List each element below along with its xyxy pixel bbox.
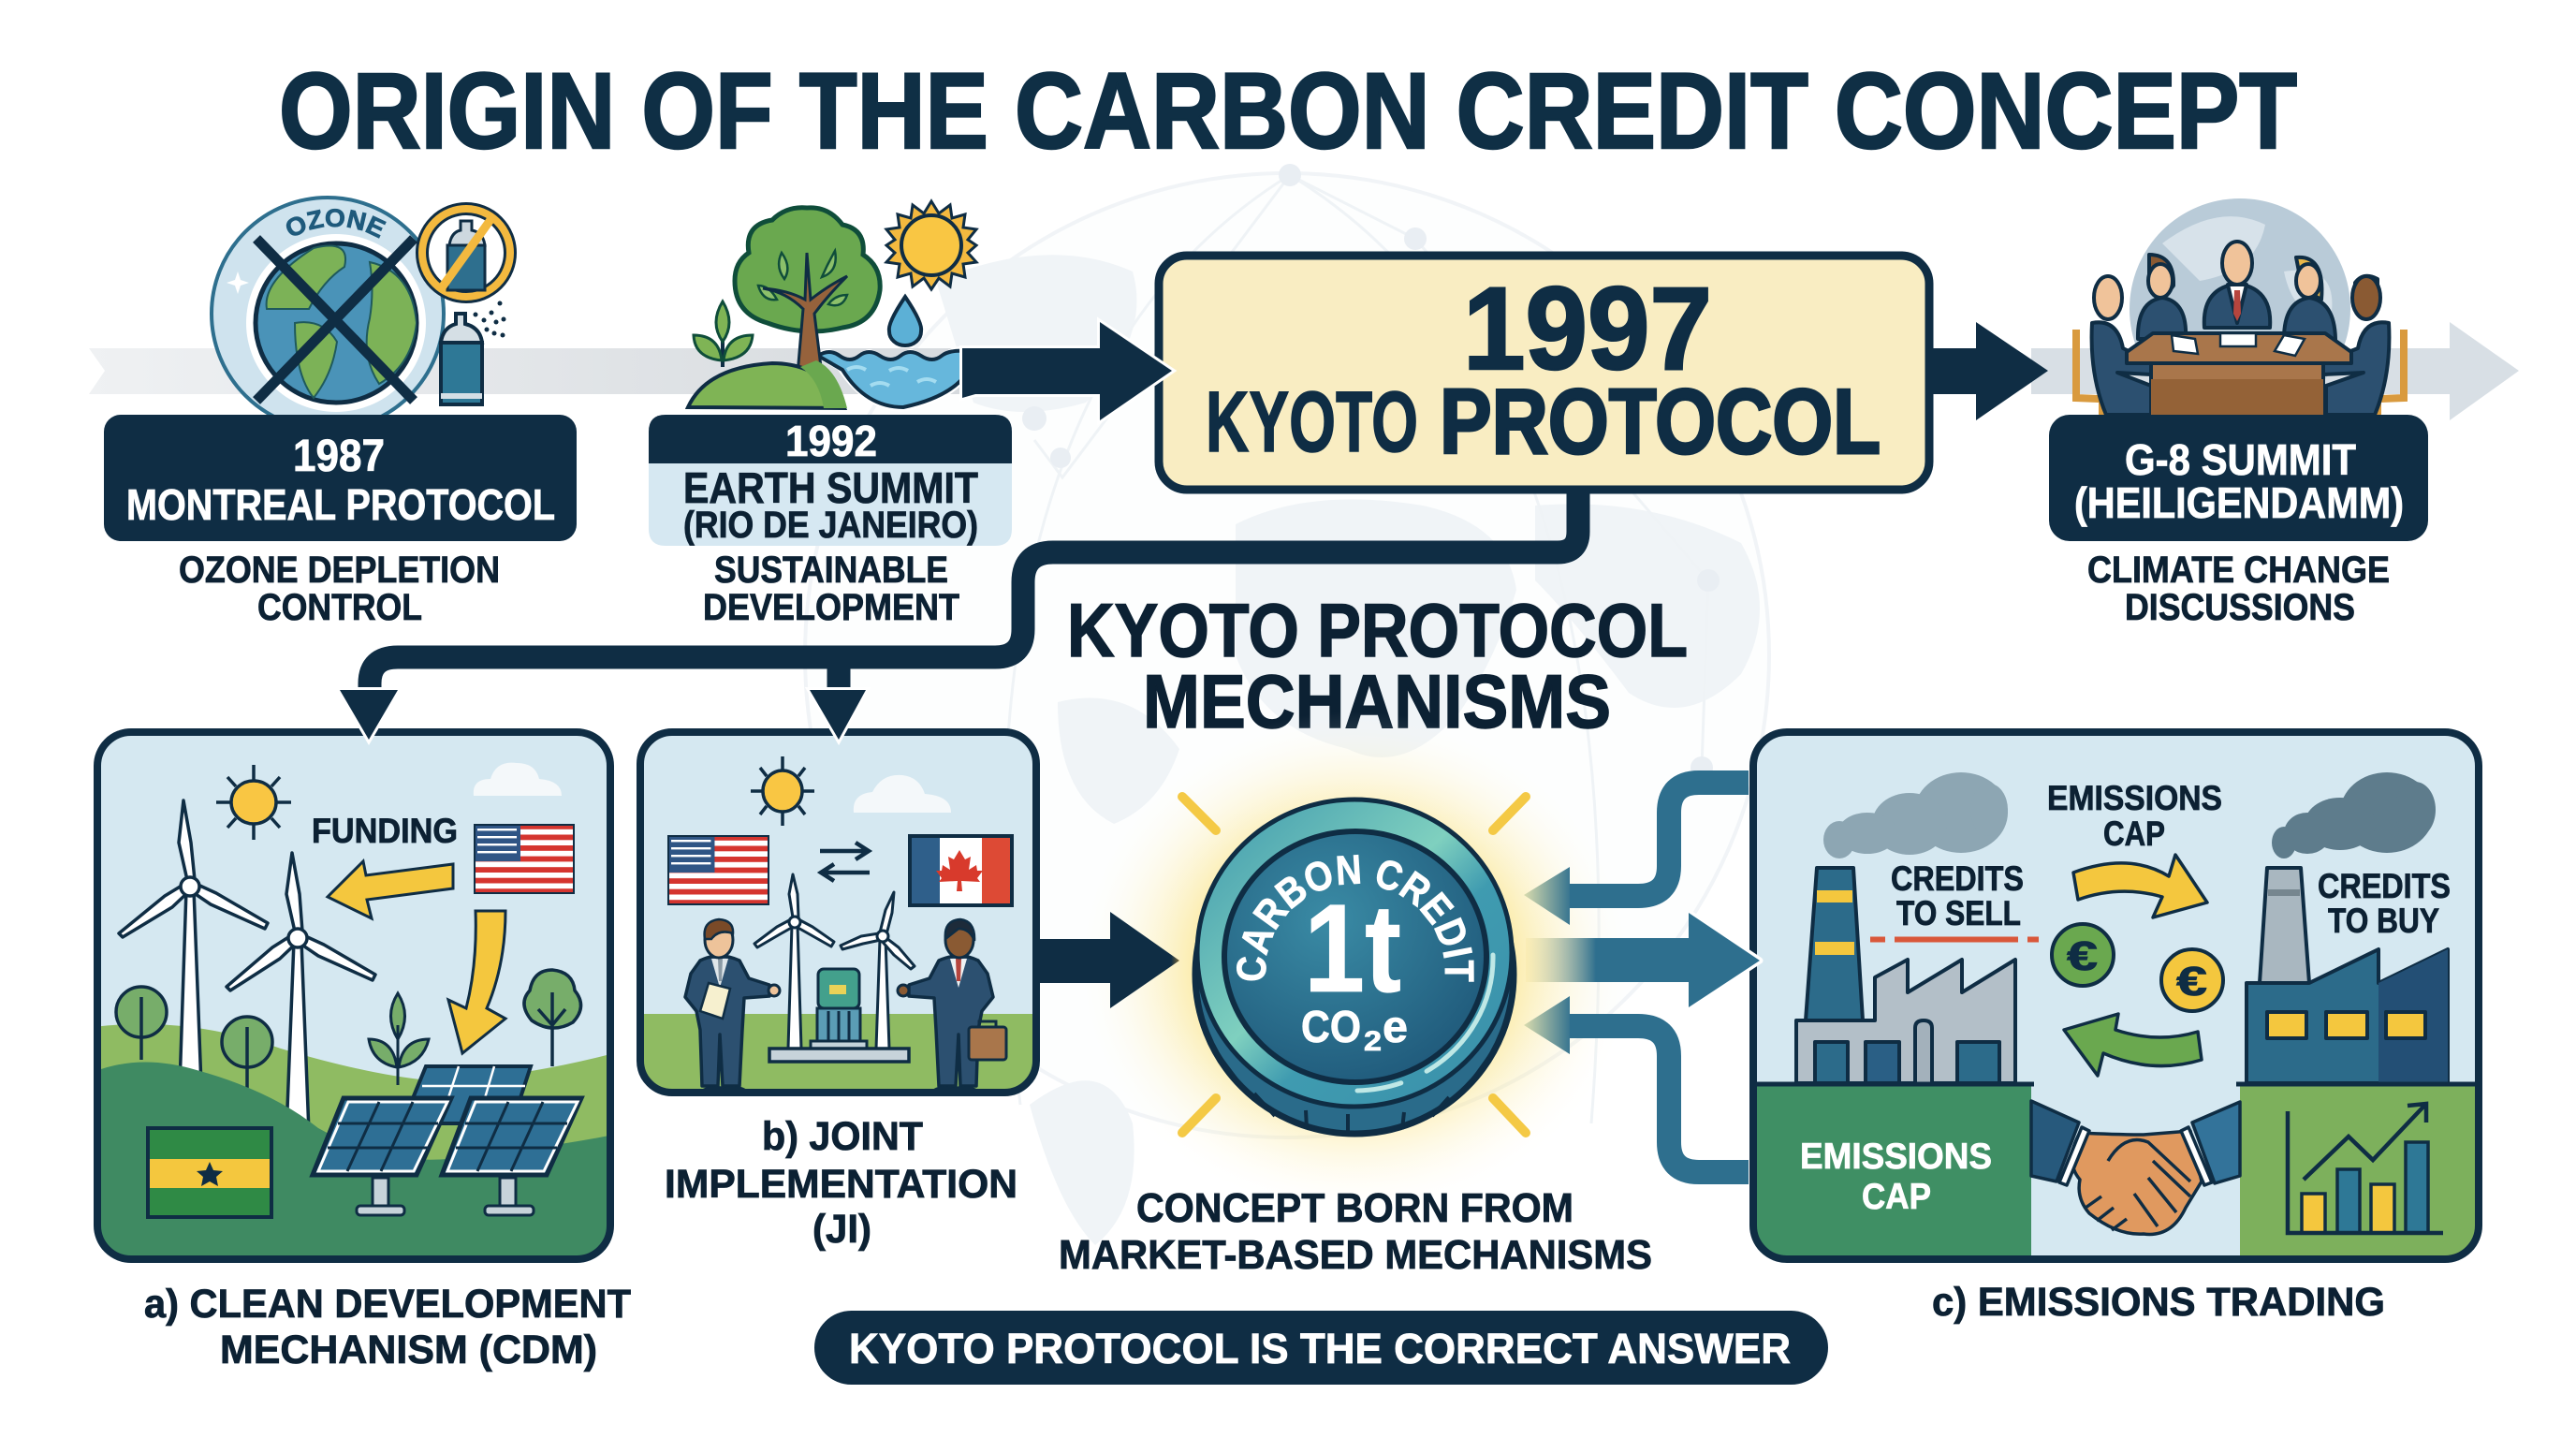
icon: spray can [441, 301, 505, 404]
cloud [474, 763, 562, 796]
ground [644, 1014, 1032, 1089]
text: ozone depletion control [179, 550, 500, 628]
arrow: earth summit to Kyoto [962, 322, 1172, 420]
arrows: coin and emissions trading [1524, 783, 1760, 1172]
sapling [369, 993, 429, 1085]
power unit [811, 969, 867, 1050]
panel: Earth Summit label: EARTH SUMMIT [683, 463, 978, 512]
callout: correct answer pill: KYOTO PROTOCOL IS THE CORRECT ANSWER [849, 1325, 1791, 1372]
seller factory [1796, 868, 2015, 1083]
panel: Emissions Trading illustration [1749, 728, 2482, 1263]
icon: no spray sign [422, 209, 510, 297]
hills back [101, 1024, 607, 1160]
panel: Joint Implementation illustration [637, 728, 1040, 1098]
panel labels: TO SELL [1896, 894, 2021, 932]
chairs [2076, 330, 2404, 415]
callout: correct answer pill [814, 1311, 1828, 1385]
label: Clean Development Mechanism [144, 1282, 631, 1372]
text: concept born from market-based mechanisms: CONCEPT BORN FROM [1136, 1185, 1573, 1231]
label: Joint Implementation: (JI) [812, 1207, 871, 1252]
background: faint globe with network [805, 164, 1769, 1245]
wind turbine 2 [227, 853, 375, 1133]
connector: Kyoto Protocol down to mechanisms [340, 493, 1578, 740]
sun [216, 765, 291, 840]
arrow: funding to solar [448, 911, 505, 1053]
text: ozone depletion control: CONTROL [257, 587, 422, 628]
arrow: Kyoto to G-8 [1933, 322, 2048, 420]
panel: Montreal Protocol label [104, 415, 577, 541]
person centre [2204, 242, 2270, 328]
person right [898, 919, 1006, 1097]
flag: Canada [910, 836, 1012, 905]
flag: United States [667, 835, 769, 905]
panel stands [357, 1178, 534, 1215]
person inner left [2138, 255, 2186, 339]
arrow: green credits [2064, 1014, 2202, 1076]
text: ozone depletion control: OZONE DEPLETION [179, 550, 500, 591]
hills front [94, 1062, 614, 1263]
funding label: FUNDING [312, 812, 458, 850]
icon: carbon credit coin: e [1383, 1003, 1408, 1052]
coin: yellow euro: € [2176, 959, 2207, 1005]
text: concept born from market-based mechanisms [1059, 1185, 1652, 1278]
panel: Montreal Protocol label: 1987 [293, 432, 385, 481]
label: Joint Implementation: IMPLEMENTATION [665, 1162, 1017, 1207]
panel: G-8 Summit label [2049, 415, 2428, 541]
panel: Clean Development Mechanism illustration [94, 728, 614, 1263]
panel: Earth Summit label: 1992 [785, 417, 877, 465]
handshake [2031, 1101, 2240, 1234]
label: Emissions Trading: c) EMISSIONS TRADING [1932, 1280, 2385, 1325]
sun [886, 201, 976, 289]
wind turbines [754, 874, 915, 1049]
icon: carbon credit coin [1117, 720, 1595, 1183]
table [2127, 333, 2351, 415]
panel: Earth Summit label: (RIO DE JANEIRO) [683, 505, 978, 546]
flag: United States [474, 824, 575, 894]
panel labels: CREDITS [1891, 859, 2024, 898]
buyer factory [2247, 868, 2448, 1083]
panel: G-8 Summit label: (HEILIGENDAMM) [2074, 478, 2404, 527]
label: Joint Implementation [665, 1114, 1017, 1252]
label: Clean Development Mechanism: a) CLEAN DEVELOPMENT [144, 1282, 631, 1327]
icon: tree, sun, water [688, 201, 981, 412]
coin text: CARBON CREDIT [1236, 854, 1474, 982]
panel: G-8 Summit label: G-8 SUMMIT [2125, 435, 2356, 484]
coin rays [1182, 797, 1526, 1133]
smoke clouds [1823, 772, 2008, 858]
panel labels: TO BUY [2328, 902, 2439, 940]
text: concept born from market-based mechanisms: MARKET-BASED MECHANISMS [1059, 1232, 1652, 1278]
lower blocks [1749, 1085, 2031, 1263]
solar panels [313, 1066, 581, 1175]
text: sustainable development: SUSTAINABLE [714, 550, 948, 591]
coin: green euro: € [2067, 933, 2098, 979]
bar chart [2288, 1104, 2443, 1233]
label: Joint Implementation: b) JOINT [762, 1114, 923, 1159]
panel: 1997 Kyoto Protocol: KYOTO [1206, 374, 1418, 470]
title: ORIGIN OF THE CARBON CREDIT CONCEPT [279, 51, 2297, 171]
panel: 1997 Kyoto Protocol: 1997 [1463, 264, 1712, 394]
panel labels: CREDITS [2318, 867, 2451, 905]
platform [769, 1049, 909, 1062]
arrow: joint implementation to coin [1040, 912, 1179, 1008]
panel labels: CAP [2103, 814, 2165, 853]
icon: carbon credit coin: CO [1301, 1003, 1361, 1052]
emissions cap block text: CAP [1862, 1177, 1931, 1217]
panel labels [1891, 779, 2451, 940]
timeline ribbon background arrow [89, 322, 2519, 420]
panel labels: EMISSIONS [2047, 779, 2222, 817]
text: climate change discussions: CLIMATE CHANGE [2087, 550, 2390, 591]
emissions cap block text [1800, 1137, 1992, 1217]
icon: carbon credit coin: 2 [1364, 1026, 1382, 1057]
coin: yellow euro [2161, 949, 2223, 1011]
panel: 1997 Kyoto Protocol: PROTOCOL [1440, 370, 1881, 473]
cloud [854, 775, 951, 813]
ozone label: OZONE [286, 208, 387, 239]
person inner right [2284, 257, 2335, 339]
panel: Earth Summit label [649, 415, 1012, 546]
person outer right [2321, 276, 2389, 415]
sun [751, 756, 814, 826]
text: climate change discussions [2087, 550, 2390, 628]
person outer left [2092, 276, 2153, 415]
text: sustainable development: DEVELOPMENT [703, 587, 959, 628]
panel: 1997 Kyoto Protocol [1159, 256, 1929, 490]
label: Clean Development Mechanism: MECHANISM (CDM) [220, 1328, 597, 1372]
panel: Montreal Protocol label: MONTREAL PROTOCOL [126, 480, 555, 529]
exchange arrows [820, 843, 870, 881]
coin: green euro [2052, 924, 2114, 986]
trees [116, 970, 581, 1088]
icon: ozone globe with spray can [210, 196, 517, 415]
text: sustainable development [703, 550, 959, 628]
heading: Kyoto Protocol mechanisms [1067, 589, 1688, 744]
arrow: funding to turbines [328, 861, 453, 918]
ground lines [1749, 1082, 2482, 1086]
icon: carbon credit coin: 1t [1304, 879, 1401, 1019]
heading: Kyoto Protocol mechanisms: MECHANISMS [1143, 660, 1611, 744]
arrow: yellow credits [2073, 855, 2207, 917]
wind turbine 1 [119, 800, 268, 1086]
icon: G-8 summit meeting [2076, 198, 2404, 419]
heading: Kyoto Protocol mechanisms: KYOTO PROTOCOL [1067, 589, 1688, 673]
dashed cap line [1870, 936, 2039, 942]
person left [685, 919, 780, 1097]
emissions cap block text: EMISSIONS [1800, 1137, 1992, 1177]
text: climate change discussions: DISCUSSIONS [2125, 587, 2355, 628]
flag: host country [148, 1128, 271, 1217]
